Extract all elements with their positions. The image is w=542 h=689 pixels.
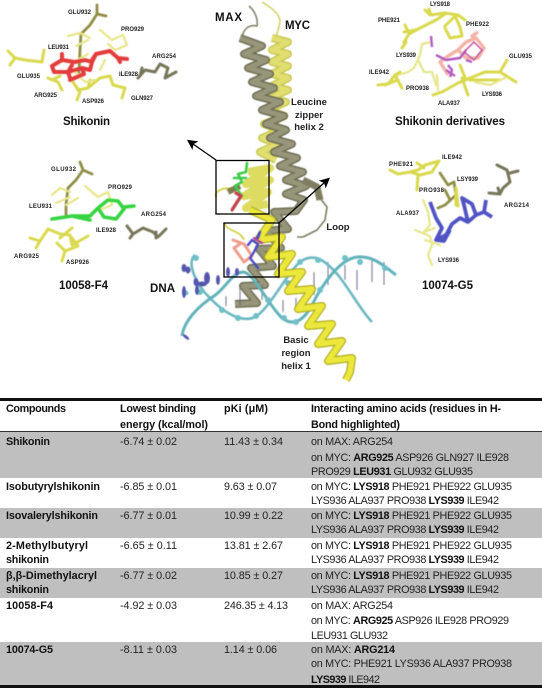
row: 2-Methylbutyryl shikonin: shikonin <box>6 554 49 566</box>
helix: MYC basic region <box>250 210 352 380</box>
residue labels: ALA937 <box>438 101 461 107</box>
table: compound binding data <box>0 398 542 688</box>
shikonin residues <box>8 5 176 100</box>
residue labels: ASP926 <box>82 99 105 105</box>
row: beta,beta-Dimethylacryl shikonin: β,β-Dimethylacryl <box>6 570 97 582</box>
10074-G5 residues <box>390 161 518 265</box>
row: 10058-F4: -4.92 ± 0.03 <box>120 600 177 612</box>
residue labels: PRO938 <box>419 188 445 194</box>
DNA double helix <box>182 255 396 341</box>
row: beta,beta-Dimethylacryl shikonin: shikonin <box>6 584 49 596</box>
row: Shikonin: on MYC: ARG925 ASP926 GLN927 ILE928 <box>311 452 509 464</box>
residue labels: LYS936 <box>482 92 503 98</box>
label: basic region helix 1: Basic <box>283 335 309 346</box>
row: Isovalerylshikonin <box>6 510 512 536</box>
row: beta,beta-Dimethylacryl shikonin: 10.85 ± 0.27 <box>224 570 283 582</box>
residue labels: GLU932 <box>68 10 92 16</box>
row: 10058-F4: 246.35 ± 4.13 <box>224 600 288 612</box>
residue labels <box>389 155 530 264</box>
icon: blue 10074-G5 molecule <box>430 198 492 241</box>
panel: central MAX-MYC structure <box>150 2 396 380</box>
residue labels: ALA937 <box>396 211 420 217</box>
residue labels: PRO929 <box>121 27 145 33</box>
row: 2-Methylbutyryl shikonin: LYS936 ALA937 PRO938 LYS939 ILE942 <box>311 554 499 566</box>
helix: MYC upper <box>216 2 288 240</box>
icon: red shikonin molecule <box>52 51 127 80</box>
table header: Bond highlighted) <box>311 419 400 431</box>
residue labels <box>14 167 167 266</box>
row: beta,beta-Dimethylacryl shikonin: on MYC: LYS918 PHE921 PHE922 GLU935 <box>311 570 512 582</box>
residue labels: PHE921 <box>378 18 401 24</box>
residue labels: GLU932 <box>51 167 77 173</box>
row: 10058-F4: LEU931 GLU932 <box>311 630 388 642</box>
row: Shikonin: 11.43 ± 0.34 <box>224 436 283 448</box>
row: Isovalerylshikonin: on MYC: LYS918 PHE921 PHE922 GLU935 <box>311 510 512 522</box>
label: MAX: MAX <box>215 12 242 24</box>
residue labels: ARG214 <box>504 203 530 209</box>
panel: Shikonin binding site <box>8 5 177 128</box>
residue labels: GLN927 <box>131 96 154 102</box>
row: 2-Methylbutyryl shikonin: on MYC: LYS918 PHE921 PHE922 GLU935 <box>311 540 512 552</box>
row: Isobutyrylshikonin: -6.85 ± 0.01 <box>120 481 177 493</box>
box: lower binding site <box>224 223 279 277</box>
panel: Shikonin derivatives binding site <box>369 2 533 128</box>
row: Isovalerylshikonin: Isovalerylshikonin <box>6 510 98 522</box>
table rules <box>0 398 542 401</box>
table header: energy (kcal/mol) <box>120 419 208 431</box>
residue labels: ASP926 <box>66 260 90 266</box>
residue labels: GLU935 <box>17 74 41 80</box>
residue labels: ILE942 <box>369 70 390 76</box>
label: basic region helix 1: region <box>281 348 311 359</box>
residue labels: ILE942 <box>442 155 463 161</box>
residue labels <box>369 2 533 107</box>
derivative residues <box>378 9 516 95</box>
residue labels: ILE928 <box>96 228 117 234</box>
arrow: to right panels <box>279 178 329 223</box>
10058-F4 residues <box>30 162 166 261</box>
heading: 10074-G5: 10074-G5 <box>422 280 474 292</box>
icon: overlaid derivative molecules <box>440 32 484 75</box>
row: 10074-G5: LYS939 ILE942 <box>311 674 380 686</box>
heading: Shikonin derivatives: Shikonin derivatives <box>395 116 505 128</box>
label: leucine zipper helix 2: zipper <box>295 110 323 121</box>
row: beta,beta-Dimethylacryl shikonin <box>6 570 512 596</box>
row: 2-Methylbutyryl shikonin: -6.65 ± 0.11 <box>120 540 177 552</box>
residue labels: LEU931 <box>48 45 70 51</box>
row: Shikonin: on MAX: ARG254 <box>311 436 393 448</box>
row: 10058-F4 <box>6 600 509 642</box>
row: Shikonin: Shikonin <box>6 436 50 448</box>
table header: Lowest binding <box>120 403 196 415</box>
row: 10074-G5: 1.14 ± 0.06 <box>224 644 277 656</box>
icon: green 10058-F4 molecule <box>52 200 134 220</box>
row: Isobutyrylshikonin: on MYC: LYS918 PHE921 PHE922 GLU935 <box>311 481 512 493</box>
label: loop: Loop <box>326 222 350 233</box>
row: 10074-G5: 10074-G5 <box>6 644 53 656</box>
arrow: to left panels <box>188 140 216 160</box>
residue labels: LYS936 <box>438 258 460 264</box>
residue labels: ARG925 <box>14 254 40 260</box>
table header: pKi (μM) <box>224 403 268 415</box>
residue labels: LYS939 <box>396 53 417 59</box>
label: basic region helix 1: helix 1 <box>281 361 311 372</box>
row: 10058-F4: on MAX: ARG254 <box>311 600 393 612</box>
table header: Interacting amino acids (residues in H- <box>311 403 501 415</box>
label: leucine zipper helix 2: helix 2 <box>294 122 324 133</box>
row: 10058-F4: on MYC: ARG925 ASP926 ILE928 PRO929 <box>311 615 509 627</box>
row: 2-Methylbutyryl shikonin: 2-Methylbutyryl <box>6 540 88 552</box>
residue labels: GLU935 <box>509 54 533 60</box>
row: Shikonin: -6.74 ± 0.02 <box>120 436 177 448</box>
panel: 10074-G5 binding site <box>389 155 530 292</box>
row: 2-Methylbutyryl shikonin <box>6 540 512 566</box>
table header: Compounds <box>6 403 66 415</box>
row: 10074-G5: on MYC: PHE921 LYS936 ALA937 PRO938 <box>311 658 512 670</box>
residue labels: LYS918 <box>430 2 451 8</box>
residue labels: ILE928 <box>119 72 139 78</box>
row: Isobutyrylshikonin: Isobutyrylshikonin <box>6 481 100 493</box>
row: Isobutyrylshikonin <box>6 481 512 507</box>
helix: MAX <box>228 6 327 304</box>
residue labels: LEU931 <box>29 204 53 210</box>
row: 10074-G5 <box>6 644 512 686</box>
label: DNA: DNA <box>150 283 175 295</box>
heading: Shikonin: Shikonin <box>63 116 110 128</box>
ligands in binding pockets <box>232 163 262 268</box>
row: Isobutyrylshikonin: LYS936 ALA937 PRO938 LYS939 ILE942 <box>311 495 499 507</box>
row: 10058-F4: 10058-F4 <box>6 600 53 612</box>
residue labels: ARG254 <box>141 212 167 218</box>
heading: 10058-F4: 10058-F4 <box>59 280 109 292</box>
row: Isovalerylshikonin: -6.77 ± 0.01 <box>120 510 177 522</box>
row: beta,beta-Dimethylacryl shikonin: LYS936 ALA937 PRO938 LYS939 ILE942 <box>311 584 499 596</box>
table header <box>6 403 501 431</box>
row: Isovalerylshikonin: LYS936 ALA937 PRO938 LYS939 ILE942 <box>311 524 499 536</box>
residue labels: PRO929 <box>108 185 133 191</box>
row backgrounds <box>0 432 542 685</box>
residue labels: ARG925 <box>34 93 58 99</box>
label: leucine zipper helix 2: Leucine <box>291 97 327 108</box>
row: 10074-G5: -8.11 ± 0.03 <box>120 644 177 656</box>
row: Isovalerylshikonin: 10.99 ± 0.22 <box>224 510 283 522</box>
row: Isobutyrylshikonin: 9.63 ± 0.07 <box>224 481 277 493</box>
residue labels: PHE921 <box>389 162 414 168</box>
row: beta,beta-Dimethylacryl shikonin: -6.77 ± 0.02 <box>120 570 177 582</box>
box: upper binding site <box>216 160 269 214</box>
row: Shikonin <box>6 436 509 478</box>
residue labels: ARG254 <box>152 54 177 60</box>
row: 2-Methylbutyryl shikonin: 13.81 ± 2.67 <box>224 540 283 552</box>
row: Shikonin: PRO929 LEU931 GLU932 GLU935 <box>311 466 473 478</box>
row: 10074-G5: on MAX: ARG214 <box>311 644 395 656</box>
label: MYC: MYC <box>285 20 310 32</box>
residue labels <box>17 10 177 105</box>
residue labels: PRO938 <box>406 86 430 92</box>
residue labels: LSY939 <box>457 177 479 183</box>
panel: 10058-F4 binding site <box>14 162 167 292</box>
residue labels: PHE922 <box>466 22 490 28</box>
